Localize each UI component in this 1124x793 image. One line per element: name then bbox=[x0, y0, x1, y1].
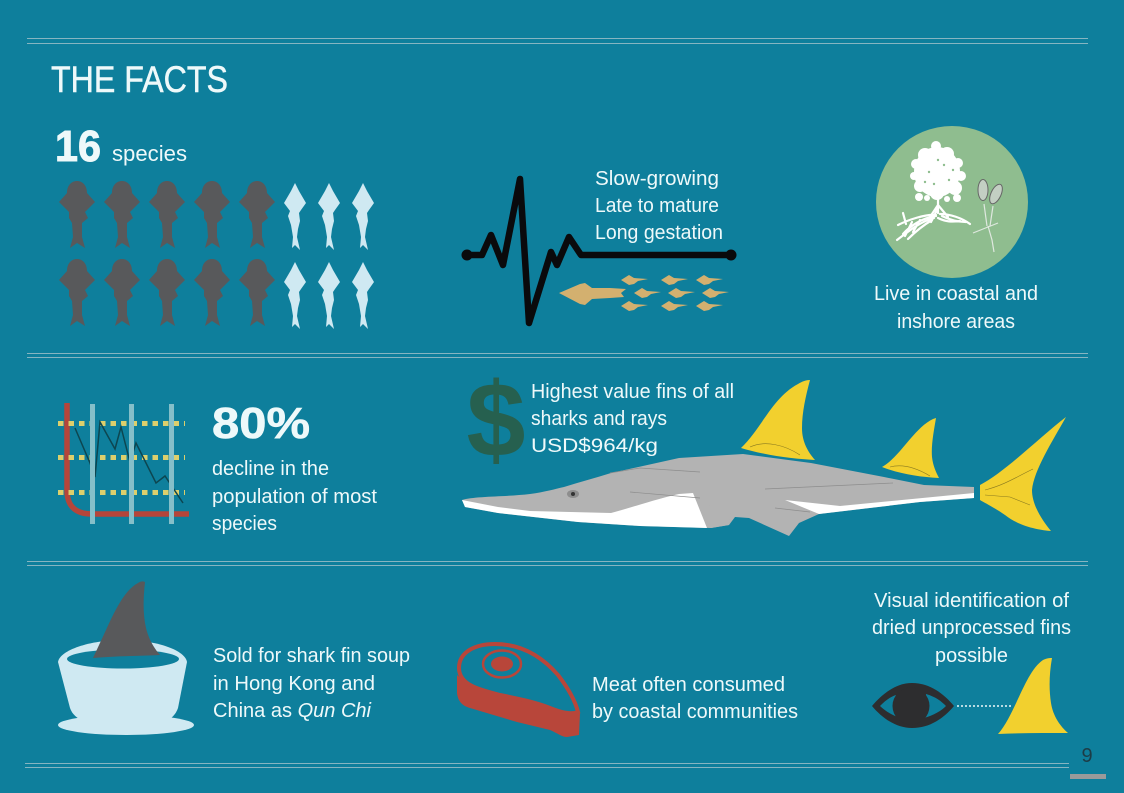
decline statistic bbox=[212, 399, 377, 535]
page number: 9 bbox=[1081, 745, 1093, 767]
life history text: Slow-growing bbox=[595, 168, 719, 190]
icon: mangrove and seagrass circle bbox=[876, 126, 1028, 278]
dotted sight line bbox=[957, 705, 1012, 707]
meat text: Meat often consumed bbox=[592, 674, 785, 696]
icon: heartbeat line bbox=[462, 179, 736, 323]
decline statistic: decline in the bbox=[212, 458, 329, 480]
habitat text bbox=[874, 283, 1038, 333]
soup text bbox=[213, 645, 410, 722]
soup text: in Hong Kong and bbox=[213, 673, 375, 695]
meat text bbox=[592, 674, 798, 723]
icon: adult and young fish bbox=[559, 275, 729, 311]
decline statistic: species bbox=[212, 513, 277, 535]
page number bbox=[1070, 745, 1106, 779]
identification text: Visual identification of bbox=[874, 590, 1069, 612]
habitat text: Live in coastal and bbox=[874, 283, 1038, 305]
identification text: possible bbox=[935, 645, 1008, 667]
icon: dollar sign: $ bbox=[467, 361, 525, 479]
icon grid: 16 species bbox=[59, 181, 374, 329]
life history text: Long gestation bbox=[595, 222, 723, 244]
illustration: shark-like ray with yellow fins bbox=[462, 380, 1066, 536]
identification text bbox=[872, 590, 1071, 667]
habitat text: inshore areas bbox=[897, 311, 1015, 333]
species count bbox=[55, 122, 187, 171]
meat text: by coastal communities bbox=[592, 701, 798, 723]
soup text: China as Qun Chi bbox=[213, 700, 372, 722]
icon: shark fin soup bowl bbox=[58, 581, 194, 735]
soup text: Sold for shark fin soup bbox=[213, 645, 410, 667]
fin value text: Highest value fins of all bbox=[531, 381, 734, 403]
identification text: dried unprocessed fins bbox=[872, 617, 1071, 639]
decline statistic: 80% bbox=[212, 399, 310, 448]
icon: dried fin bbox=[998, 658, 1068, 734]
fin value text bbox=[531, 381, 734, 457]
life history text: Late to mature bbox=[595, 195, 719, 217]
icon: decline chart bbox=[58, 403, 189, 524]
decline statistic: population of most bbox=[212, 486, 377, 508]
fin value text: USD$964/kg bbox=[531, 436, 658, 457]
species count: 16 bbox=[55, 122, 101, 171]
icon: eye bbox=[872, 683, 954, 728]
species count: species bbox=[112, 141, 187, 166]
icon: meat steak bbox=[457, 644, 580, 737]
title: THE FACTS bbox=[51, 59, 228, 100]
life history text bbox=[595, 168, 723, 244]
fin value text: sharks and rays bbox=[531, 408, 667, 430]
